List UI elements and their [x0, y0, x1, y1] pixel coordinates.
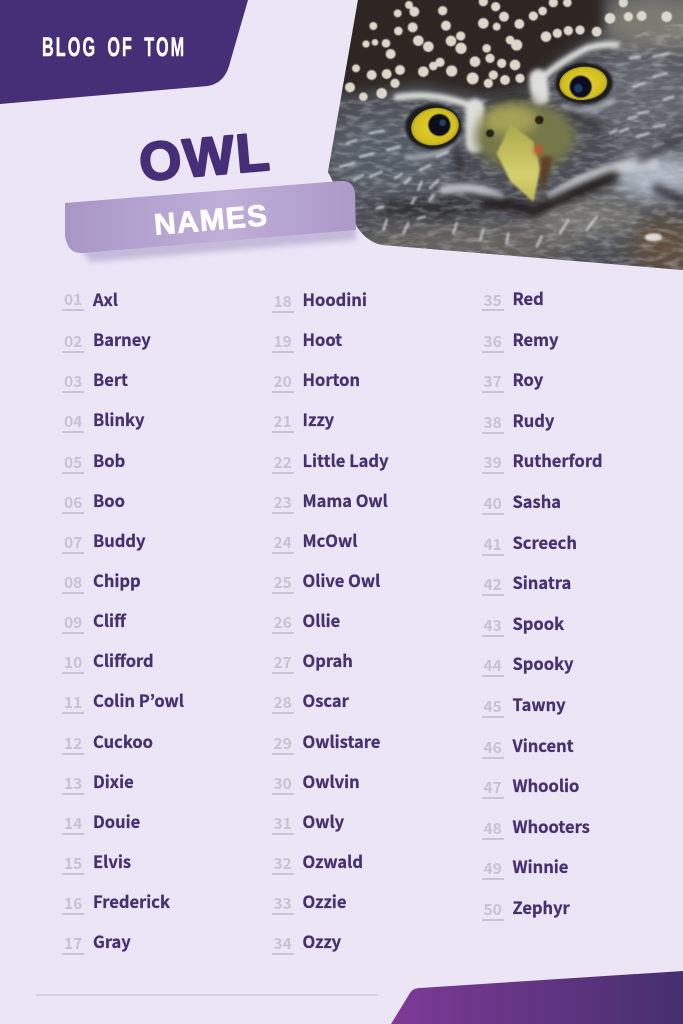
title: OWL: OWL: [137, 122, 274, 193]
name 40: [480, 490, 680, 514]
title: NAMES: NAMES: [153, 199, 270, 242]
name 34: Ozzy: [302, 929, 341, 953]
name 22: Little Lady: [302, 448, 388, 472]
name 46: [480, 734, 680, 758]
name 48: Whooters: [512, 814, 590, 838]
name 44: 44: [484, 654, 502, 676]
name 36: [482, 327, 559, 353]
name 45: Tawny: [512, 692, 566, 716]
name 29: 29: [274, 732, 292, 754]
name 24: 24: [274, 530, 292, 552]
name 14: Douie: [93, 809, 140, 833]
name 30: 30: [274, 772, 292, 794]
name 03: 03: [64, 370, 82, 392]
name 18: [272, 286, 367, 313]
name 07: [62, 528, 146, 554]
name 19: 19: [274, 330, 292, 352]
name 09: Cliff: [93, 608, 126, 632]
name 29: [272, 728, 380, 755]
white brows and facial discs: [397, 45, 653, 197]
name 34: 34: [274, 932, 292, 954]
name 04: 04: [64, 410, 82, 432]
name 02: Barney: [93, 327, 151, 351]
name 07: 07: [64, 531, 82, 553]
name 42: 42: [484, 573, 502, 595]
name 14: 14: [64, 812, 82, 834]
name 48: 48: [484, 817, 502, 839]
name 01: [62, 287, 118, 311]
name 38: Rudy: [512, 408, 554, 432]
name 21: [272, 406, 334, 433]
name 19: Hoot: [302, 326, 342, 350]
name 40: 40: [484, 492, 502, 514]
name 41: Screech: [512, 530, 577, 554]
name 18: 18: [274, 290, 292, 312]
name 47: 47: [484, 776, 502, 798]
name 50: 50: [484, 898, 502, 920]
name 31: [272, 808, 344, 835]
name 10: 10: [64, 651, 82, 673]
name 03: [62, 367, 128, 393]
name 15: 15: [64, 852, 82, 874]
name 20: Horton: [302, 366, 360, 390]
name 13: Dixie: [93, 768, 134, 792]
name 04: Blinky: [93, 407, 144, 431]
owl photo: [320, 0, 683, 280]
name 48: [480, 815, 680, 839]
name 33: Ozzie: [302, 888, 346, 912]
name 17: [62, 929, 131, 955]
name 38: [480, 409, 680, 433]
name 45: 45: [484, 695, 502, 717]
name 15: Elvis: [93, 849, 131, 873]
name 06: 06: [64, 490, 82, 512]
name 22: [272, 448, 388, 474]
right eye: [555, 63, 613, 104]
name 06: Boo: [93, 488, 125, 512]
name 27: Oprah: [302, 648, 353, 672]
owl beak: [497, 124, 541, 202]
name 42: [480, 571, 680, 595]
name 10: [62, 648, 154, 674]
white throat mark: [645, 233, 662, 241]
name 20: 20: [274, 370, 292, 392]
name 50: [480, 896, 680, 920]
name 21: 21: [274, 410, 292, 432]
cheek streaks: [340, 53, 682, 247]
name 13: 13: [64, 772, 82, 794]
name 12: 12: [64, 732, 82, 754]
name 46: Vincent: [512, 733, 574, 757]
name 12: Cuckoo: [93, 728, 153, 752]
banner shadow: [80, 226, 356, 262]
name 32: [272, 848, 363, 875]
name 26: [272, 608, 340, 634]
name 12: [62, 728, 153, 755]
name 49: [480, 855, 680, 879]
brand name: BLOG OF TOM: [42, 32, 186, 62]
name 17: Gray: [93, 929, 131, 953]
name 02: [62, 327, 151, 353]
name 24: McOwl: [302, 528, 357, 552]
name 06: [62, 488, 125, 514]
name 01: 01: [64, 288, 82, 310]
name 31: 31: [274, 812, 292, 834]
name 08: Chipp: [93, 568, 141, 592]
name 47: Whoolio: [512, 773, 579, 797]
header tab: [0, 0, 248, 104]
dark forehead: [337, 0, 603, 95]
name 03: Bert: [93, 367, 128, 391]
name 16: [62, 889, 170, 915]
name 47: [480, 774, 680, 798]
name 43: Spook: [512, 611, 564, 635]
name 30: Owlvin: [302, 768, 360, 792]
name 11: [62, 688, 184, 714]
name 34: [272, 929, 341, 955]
name 14: [62, 809, 140, 835]
owl cere: [475, 103, 575, 170]
name 08: 08: [64, 571, 82, 593]
name 22: 22: [274, 450, 292, 472]
name 02: 02: [64, 330, 82, 352]
name 39: [480, 449, 680, 473]
name 13: [62, 768, 134, 795]
name 30: [272, 768, 360, 795]
name 40: Sasha: [512, 489, 561, 513]
footer tab: [391, 971, 683, 1024]
name 24: [272, 528, 358, 554]
name 38: 38: [484, 411, 502, 433]
name 20: [272, 366, 360, 393]
name 37: 37: [484, 370, 502, 392]
name 43: [480, 612, 680, 636]
name 36: Remy: [512, 327, 559, 351]
name 27: 27: [274, 650, 292, 672]
name 41: [480, 531, 680, 555]
name 05: 05: [64, 450, 82, 472]
name 45: [480, 693, 680, 717]
names column 2: [272, 286, 388, 955]
name 04: [62, 407, 144, 433]
name 23: 23: [274, 490, 292, 512]
name 37: Roy: [512, 367, 543, 391]
left eye: [405, 104, 462, 149]
feather spots: [345, 0, 672, 101]
name 19: [272, 326, 342, 353]
name 44: Spooky: [512, 651, 574, 675]
name 39: 39: [484, 451, 502, 473]
names column 3: [482, 286, 602, 921]
banner: [65, 181, 356, 253]
name 09: 09: [64, 611, 82, 633]
name 28: [272, 688, 349, 714]
name 31: Owly: [302, 808, 344, 832]
name 26: Ollie: [302, 608, 340, 632]
name 05: [62, 448, 125, 474]
name 21: Izzy: [302, 406, 334, 430]
name 36: 36: [484, 330, 502, 352]
name 11: 11: [64, 691, 82, 713]
name 23: Mama Owl: [302, 488, 388, 512]
name 09: [62, 608, 127, 634]
name 29: Owlistare: [302, 728, 380, 752]
name 11: Colin P’owl: [93, 688, 184, 712]
names column 1: [62, 287, 184, 955]
name 32: Ozwald: [302, 848, 363, 872]
name 33: [272, 888, 346, 915]
name 25: Olive Owl: [302, 568, 380, 592]
name 44: [480, 652, 680, 676]
facial dark markings: [457, 97, 682, 212]
footer rule: [36, 994, 378, 996]
name 49: Winnie: [512, 854, 568, 878]
name 35: [482, 286, 544, 311]
name 01: Axl: [93, 287, 118, 311]
name 10: Clifford: [93, 648, 154, 672]
name 27: [272, 648, 353, 674]
name 15: [62, 849, 131, 875]
name 49: 49: [484, 857, 502, 879]
name 16: 16: [64, 892, 82, 914]
name 39: Rutherford: [512, 448, 602, 472]
name 41: 41: [484, 533, 502, 555]
name 43: 43: [484, 614, 502, 636]
name 16: Frederick: [93, 889, 170, 913]
name 46: 46: [484, 736, 502, 758]
name 35: 35: [484, 289, 502, 311]
name 17: 17: [64, 932, 82, 954]
name 37: [482, 367, 544, 393]
name 42: Sinatra: [512, 570, 571, 594]
name 28: 28: [274, 690, 292, 712]
name 26: 26: [274, 610, 292, 632]
name 25: [272, 568, 380, 594]
name 25: 25: [274, 570, 292, 592]
name 28: Oscar: [302, 688, 349, 712]
name 33: 33: [274, 892, 292, 914]
name 50: Zephyr: [512, 895, 570, 919]
name 08: [62, 568, 141, 594]
name 05: Bob: [93, 448, 125, 472]
name 18: Hoodini: [302, 286, 367, 310]
name 23: [272, 488, 388, 514]
name 35: Red: [512, 286, 544, 310]
name 07: Buddy: [93, 528, 145, 552]
name 32: 32: [274, 852, 292, 874]
